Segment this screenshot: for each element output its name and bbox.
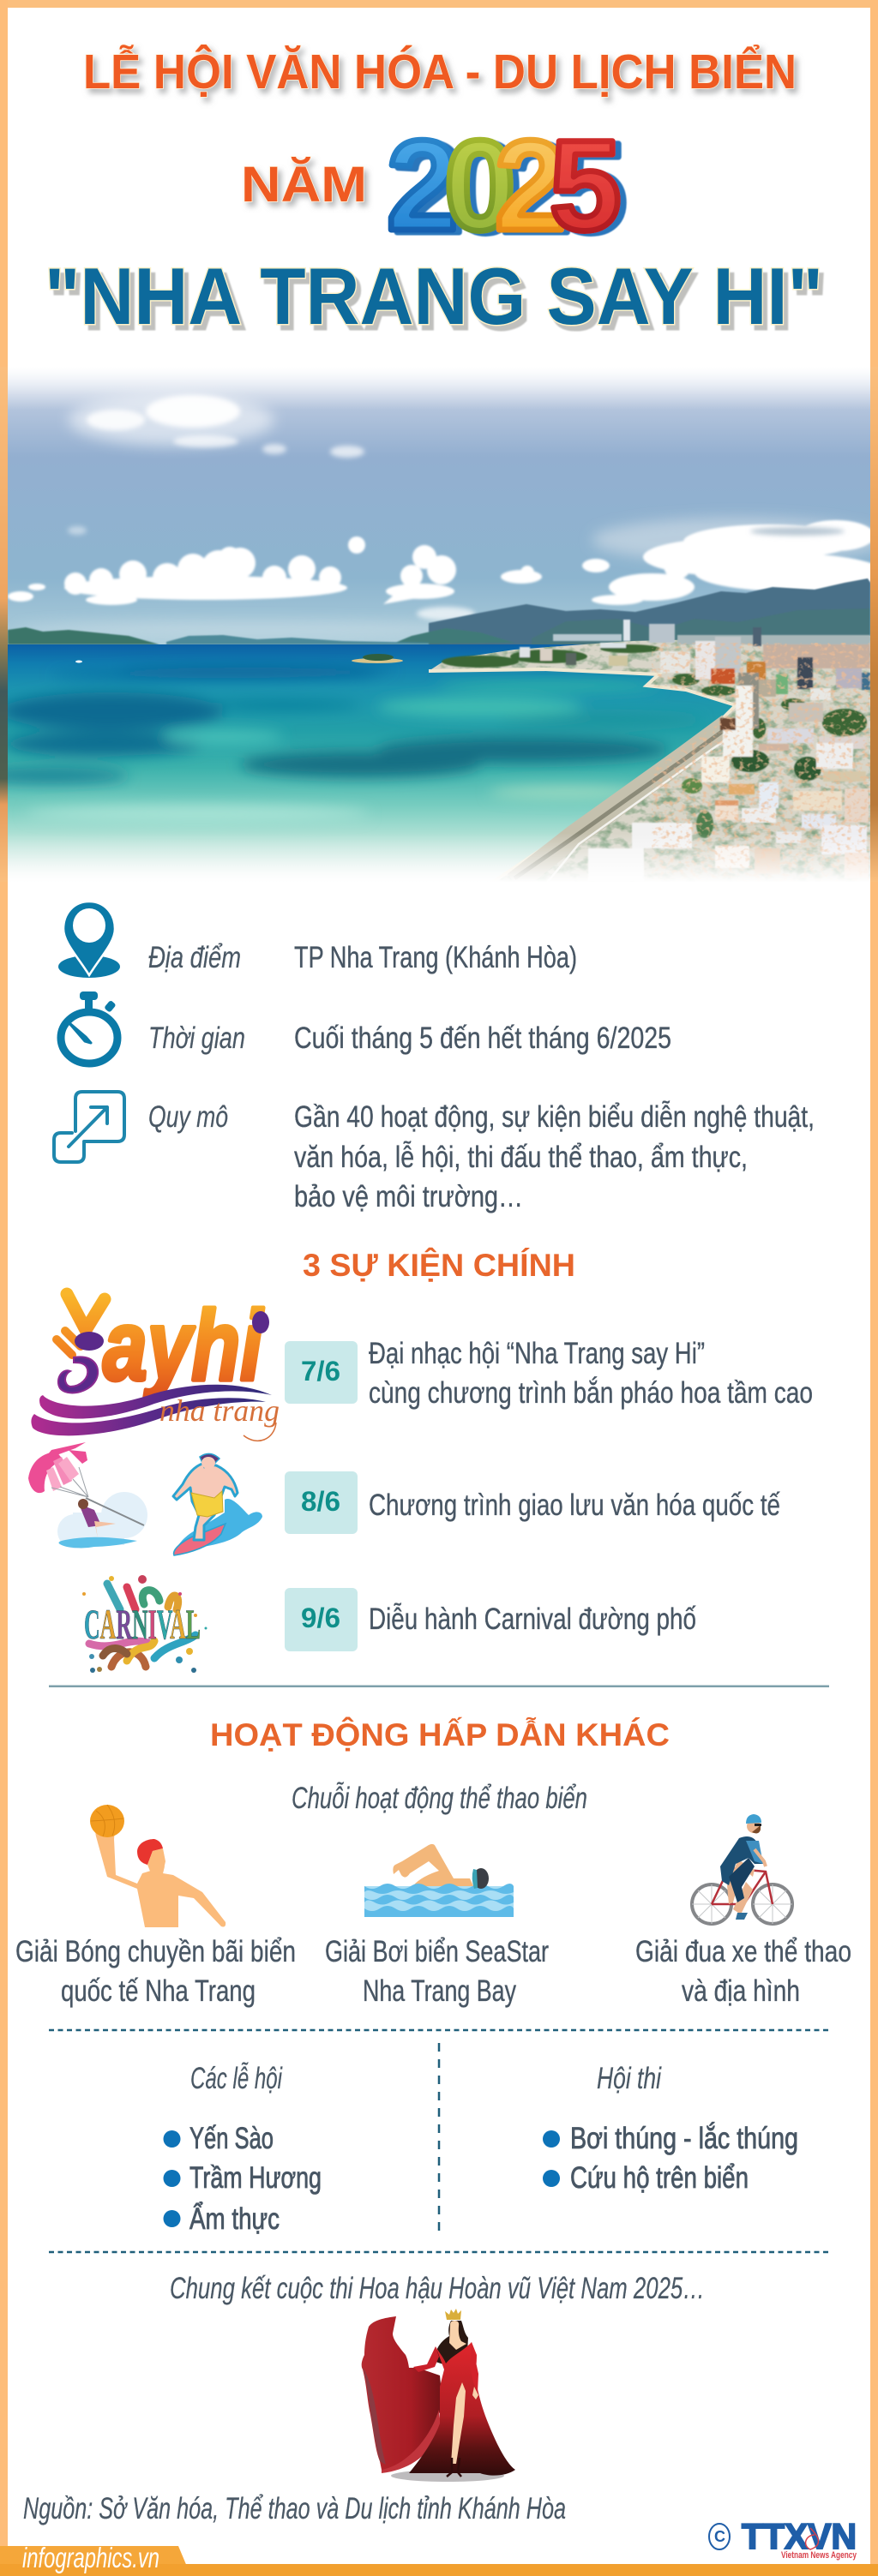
logo: TTXVN copyright <box>709 2516 857 2561</box>
title: 3D 2025 numerals: 5 <box>550 113 621 257</box>
sky <box>8 367 870 650</box>
list: contests: Bơi thúng - lắc thúng <box>570 2122 798 2155</box>
label: beach volleyball <box>15 1935 296 2008</box>
title block <box>45 44 823 341</box>
coastline land <box>431 636 870 879</box>
text: scale value <box>294 1100 815 1213</box>
label: time: Thời gian <box>148 1021 245 1055</box>
icon: Say Hi Nha Trang logo: ayhi <box>103 1290 264 1401</box>
event text: 8/6: Chương trình giao lưu văn hóa quốc tế <box>369 1489 780 1522</box>
sea <box>8 644 732 871</box>
panel: festivals <box>163 2062 322 2236</box>
date badge 9/6: 9/6 <box>301 1603 340 1633</box>
label: SeaStar swim: Giải Bơi biển SeaStar <box>325 1935 549 1968</box>
list: festivals: Ẩm thực <box>189 2202 280 2236</box>
label: location: Địa điểm <box>148 941 241 974</box>
panel: contests <box>543 2062 798 2195</box>
title: Nha Trang say Hi: "NHA TRANG SAY HI" <box>45 251 823 341</box>
heading: 3 main events: 3 SỰ KIỆN CHÍNH <box>303 1247 575 1283</box>
source note: Nguồn: Sở Văn hóa, Thể thao và Du lịch tỉnh Khánh Hòa <box>23 2492 566 2525</box>
icon: swimmer <box>364 1844 514 1917</box>
icon: carnival <box>82 1575 207 1673</box>
panel: festival facts <box>54 902 815 1213</box>
photo: Nha Trang bay <box>0 367 878 887</box>
panel: Miss Universe Vietnam final <box>170 2272 705 2482</box>
label: SeaStar swim: Nha Trang Bay <box>363 1974 516 2008</box>
list: contests: Cứu hộ trên biển <box>570 2161 749 2195</box>
list: festivals: Yến Sào <box>189 2122 274 2155</box>
list: festivals: Trầm Hương <box>189 2161 322 2195</box>
heading: other attractive activities: HOẠT ĐỘNG HẤP DẪN KHÁC <box>210 1716 670 1752</box>
subheading: festivals: Các lễ hội <box>190 2062 283 2095</box>
icon: surfer <box>173 1453 262 1555</box>
icon: water polo player <box>90 1805 226 1927</box>
date badge 9/6 <box>285 1588 358 1651</box>
date badge 7/6: 7/6 <box>301 1356 340 1387</box>
title: 3D 2025 numerals: 2 <box>387 113 458 257</box>
label: beach volleyball: quốc tế Nha Trang <box>61 1974 256 2008</box>
photo top fade <box>8 367 870 404</box>
photo bottom fade <box>8 833 870 883</box>
date badge 7/6 <box>285 1341 358 1404</box>
label: scale: Quy mô <box>148 1100 228 1134</box>
roof texture <box>652 643 878 887</box>
list: festivals <box>163 2122 322 2236</box>
event text: 7/6 <box>369 1337 813 1410</box>
title: 3D 2025 numerals: 0 <box>444 113 515 257</box>
list: contests <box>543 2122 798 2195</box>
text: time value: Cuối tháng 5 đến hết tháng 6/2025 <box>294 1021 671 1055</box>
icon: location pin <box>58 902 120 978</box>
footer url: infographics.vn <box>22 2542 159 2573</box>
title line 1: LỄ HỘI VĂN HÓA - DU LỊCH BIỂN <box>83 44 797 99</box>
text: location value: TP Nha Trang (Khánh Hòa) <box>294 941 577 974</box>
title: 3D 2025 numerals: 2 <box>495 113 566 257</box>
text: scale value: bảo vệ môi trường… <box>294 1180 523 1213</box>
icon: Say Hi Nha Trang logo: nha trang <box>159 1393 280 1428</box>
icon: carnival: CARNIVAL <box>84 1600 201 1648</box>
event text: 7/6: Đại nhạc hội “Nha Trang say Hi” <box>369 1337 705 1370</box>
logo: TTXVN copyright: C <box>714 2528 725 2545</box>
icon: Say Hi Nha Trang logo <box>31 1290 280 1441</box>
mountains <box>8 578 870 647</box>
sea shadows and shallows <box>0 667 703 823</box>
icon: cyclist <box>692 1814 792 1924</box>
small island <box>75 654 403 663</box>
label: beach volleyball: Giải Bóng chuyền bãi biển <box>15 1935 296 1968</box>
clouds <box>8 394 878 638</box>
panel: main events <box>28 1290 813 1673</box>
label: SeaStar swim <box>325 1935 549 2008</box>
event text: 9/6: Diễu hành Carnival đường phố <box>369 1603 696 1636</box>
icon: stopwatch <box>61 991 117 1063</box>
icon: expand arrows <box>54 1092 124 1162</box>
label: cycling <box>635 1935 851 2008</box>
date badge 8/6 <box>285 1471 358 1534</box>
title: NĂM: NĂM <box>241 157 367 213</box>
icon: parasailing <box>28 1442 147 1549</box>
subheading: sea sports: Chuỗi hoạt động thể thao biển <box>292 1782 587 1815</box>
panel: sea sports series <box>15 1782 851 2008</box>
beach and road <box>429 669 736 883</box>
text: scale value: văn hóa, lễ hội, thi đấu thể thao, ẩm thực, <box>294 1141 748 1174</box>
text: pageant final: Chung kết cuộc thi Hoa hậu Hoàn vũ Việt Nam 2025… <box>170 2272 705 2305</box>
label: cycling: và địa hình <box>682 1974 800 2008</box>
footer band <box>0 2542 878 2576</box>
subheading: contests: Hội thi <box>597 2062 662 2095</box>
trees and city buildings <box>442 620 870 881</box>
date badge 8/6: 8/6 <box>301 1486 340 1517</box>
logo: TTXVN copyright: TTXVN <box>742 2516 857 2556</box>
icon: beauty queen in red gown <box>362 2309 515 2482</box>
